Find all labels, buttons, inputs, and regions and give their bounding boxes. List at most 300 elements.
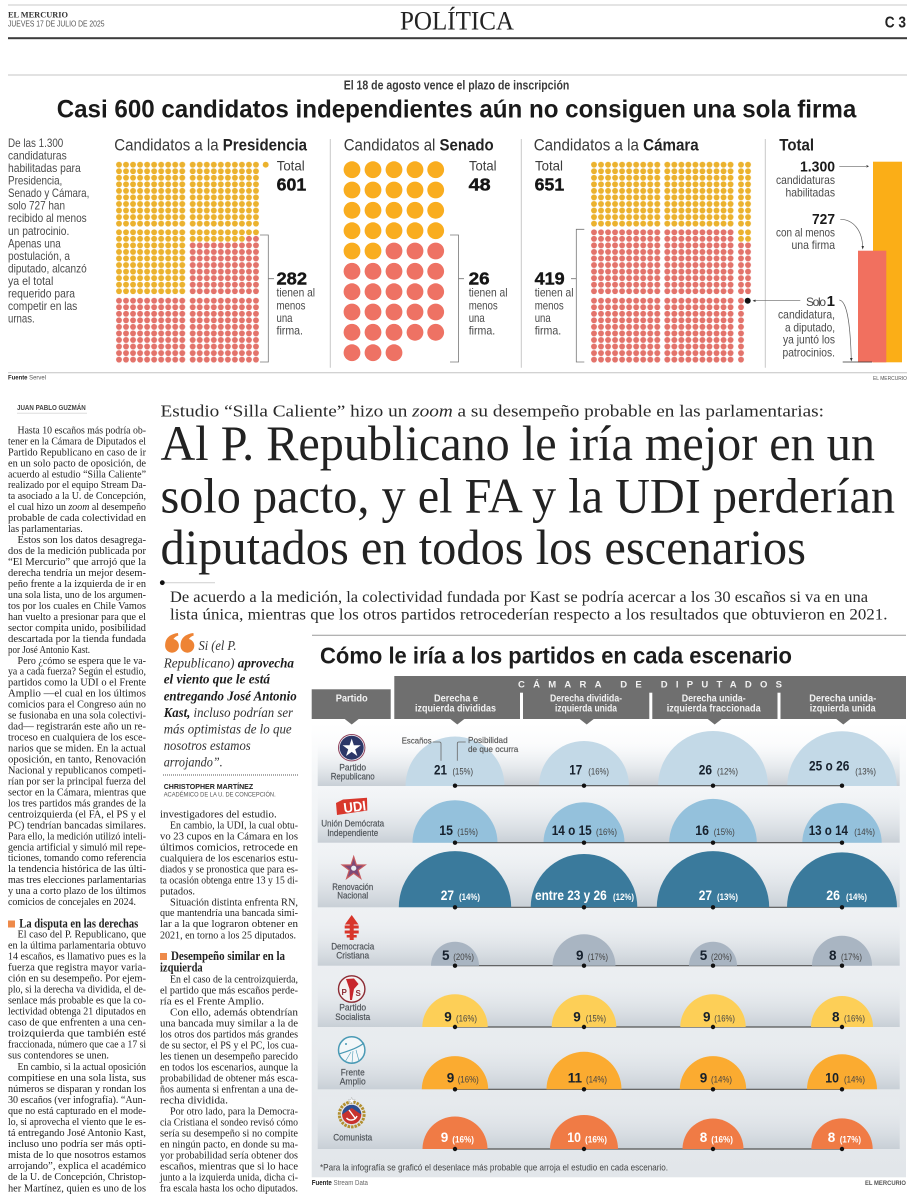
article column 1: 14 escaños, es llamativo pues es la [8, 951, 146, 963]
icon: RN star [342, 857, 365, 878]
row: Partido Socialista: (16%) [456, 1014, 477, 1025]
article column 1: números se disparan y rondan los [8, 1083, 146, 1095]
row: Democracia Cristiana: 5 [442, 948, 450, 963]
table header: izquierda unida [555, 703, 617, 715]
row: Comunista: 9 [441, 1130, 448, 1145]
row: Partido Republicano: 21 [434, 762, 447, 777]
subheading: Desempeño similar en la izquierda: Desempeño similar en la [171, 949, 286, 963]
panel: candidatos a la Presidencia: 601 [277, 175, 306, 195]
row: UDI: (14%) [854, 827, 875, 838]
row: Renovación Nacional: (14%) [846, 892, 867, 903]
article column 1: El caso del P. Republicano, que [18, 929, 146, 941]
source: Stream Data [312, 1180, 906, 1187]
row: UDI: 15 [439, 823, 453, 838]
row: Partido Socialista: (15%) [586, 1014, 606, 1025]
article column 1: troizquierda que también esté [8, 1027, 146, 1039]
article column 1: “El Mercurio” que arrojó que la [8, 556, 146, 568]
panel: candidatos a la Presidencia: menos [276, 298, 306, 312]
intro text block: candidates: Presidencia, [8, 174, 62, 188]
row: Comunista [318, 1095, 900, 1151]
pull quote: entregando José Antonio [164, 689, 297, 704]
article column 1: mas tres elecciones parlamentarias [8, 874, 146, 886]
article column 2: sería su desempeño si no compite [160, 1127, 298, 1139]
pull quote: más optimistas de lo que [164, 723, 292, 738]
article column 2: en ningún pacto, en donde su ma- [160, 1138, 298, 1150]
article column 1: plo, si la derecha va dividida, el de- [8, 984, 146, 996]
article column 2: escaños, mientras que si lo hace [160, 1160, 298, 1172]
article column 1: ción en su desempeño. Por ejem- [8, 973, 146, 985]
headline: Partido Republicano: Al P. Republicano le iría mejor en un [160, 415, 875, 471]
intro text block: candidates: un patrocinio. [8, 224, 69, 238]
article column 1: y una a corto plazo de los últimos [8, 885, 146, 897]
row: Partido Republicano: (12%) [717, 766, 738, 777]
intro text block: candidates: diputado, alcanzó [8, 261, 87, 275]
row: Democracia Cristiana: (20%) [453, 952, 474, 963]
article column 1: sector compita unido, posibilidad [8, 622, 146, 634]
panel: total bars: 727 [812, 211, 835, 228]
article column 1: que no está capturado en el mode- [8, 1105, 146, 1117]
row: Frente Amplio [318, 1035, 900, 1092]
article column 1: ta asociado a la U. de Concepción, [8, 490, 146, 502]
article column 1: las parlamentarias. [8, 523, 83, 535]
article column 2: lar a la que lograron obtener en [160, 918, 299, 930]
article column 2: yor probabilidad sería obtener dos [160, 1149, 298, 1161]
article column 2: putados. [160, 885, 195, 897]
article column 2: Situación distinta enfrenta RN, [170, 896, 298, 908]
legend: escaños and posibilidad: de que ocurra [468, 744, 519, 754]
legend: escaños and posibilidad: Posibilidad [468, 735, 508, 745]
source: Stream Data: EL MERCURIO [865, 1180, 906, 1187]
headline: Partido Republicano: diputados en todos los escenarios [160, 519, 806, 575]
article column 2: vo 23 cupos en la Cámara en los [160, 830, 298, 842]
row: Partido Socialista: Socialista [335, 1012, 370, 1022]
icon: quotation mark [165, 633, 194, 653]
panel: candidatos a la Presidencia: Candidatos a la Presidencia [114, 136, 307, 155]
panel: candidatos al Senado: tienen al [469, 286, 508, 300]
article column 1: lectividad obtenga 21 diputados en [8, 1006, 146, 1018]
article column 1: en la última parlamentaria obtuvo [8, 940, 146, 952]
row: Democracia Cristiana: (17%) [588, 952, 608, 963]
article column 1: oposición, en tanto, Renovación [8, 754, 146, 766]
article column 2: últimos comicios, retrocede en [160, 841, 299, 853]
icon: PS emblem: S [356, 989, 362, 998]
article column 1: caso de que enfrenten a una cen- [8, 1016, 146, 1028]
row: Frente Amplio: 9 [700, 1071, 707, 1086]
article column 2: fra escala hasta los ocho diputados. [160, 1183, 298, 1195]
row: UDI: (15%) [714, 827, 735, 838]
row: Renovación Nacional: (12%) [613, 892, 634, 903]
icon: UDI logo: UDI [343, 797, 367, 816]
pull quote: Republicano) aprovecha [163, 656, 294, 671]
panel: total bars: habilitadas [786, 185, 835, 199]
article column 1: ya a cada fuerza? Según el estudio, [8, 666, 146, 678]
panel: candidatos al Senado: Total [469, 158, 496, 174]
panel: candidatos a la Cámara: Total [535, 158, 563, 174]
panel: candidatos a la Presidencia: Total [277, 158, 305, 174]
legend: escaños and posibilidad [402, 735, 519, 761]
article column 2: el partido que más escaños perde- [160, 984, 298, 996]
article column 2 [159, 809, 299, 1195]
row: Democracia Cristiana: (20%) [711, 952, 732, 963]
row: Comunista: (16%) [452, 1134, 474, 1145]
article column 2: en todos los escenarios, aunque la [160, 1061, 298, 1073]
article column 1: rían por ser la principal fuerza del [8, 775, 146, 787]
article column 2: de su sector, el PS y el PC, los cua- [160, 1039, 298, 1051]
article column 1 [8, 424, 146, 1195]
row: Partido Socialista: Partido [339, 1003, 366, 1013]
icon: PS emblem: P [342, 988, 348, 997]
panel: total bars: 1.300 [800, 158, 835, 175]
article column 1: Amplio —el cual en los últimos [8, 688, 146, 700]
footnote: *Para la infografía se graficó el desenlace más probable que arroja el estudio en cada escenario. [320, 1163, 668, 1174]
headline: Partido Republicano: solo pacto, y el FA y la UDI perderían [160, 468, 895, 524]
article column 1: Estos son los datos desagrega- [18, 534, 146, 546]
panel: total bars: candidatura, [778, 308, 835, 322]
article column 2: les tienen un desempeño parecido [160, 1050, 298, 1062]
article column 1: her Martínez, quien es uno de los [8, 1183, 146, 1195]
article column 2: que mantendría una bancada simi- [160, 907, 298, 919]
panel: total bars: a diputado, [785, 320, 835, 334]
source: Servel: EL MERCURIO [873, 376, 908, 382]
article column 1: PC) tendrían bancadas similares. [8, 819, 146, 831]
row: Frente Amplio: 10 [825, 1071, 839, 1086]
article column 1: partidos como la UDI o el Frente [8, 677, 146, 689]
panel: total bars: Total [779, 136, 814, 155]
legend: escaños and posibilidad: Escaños [402, 735, 432, 745]
icon: FA emblem [338, 1037, 365, 1063]
row: Partido Socialista: 9 [703, 1010, 711, 1025]
article column 1: En cambio, si la actual oposición [18, 1061, 146, 1073]
article column 1: senlace más probable es que la co- [8, 994, 146, 1006]
panel: candidatos al Senado [330, 136, 508, 368]
pull quote [163, 633, 298, 798]
icon: Republicano star [338, 734, 365, 761]
intro text: measurement: De acuerdo a la medición, la colectividad fundada por Kast se podría acercar a los 30 escaños si va en una [170, 589, 868, 606]
panel: candidatos a la Cámara: firma. [535, 323, 561, 337]
article column 2: los otros dos partidos más grandes [160, 1028, 298, 1040]
row: Renovación Nacional [318, 845, 900, 910]
article column 2: ños aumenta si enfrentan a una de- [160, 1083, 298, 1095]
article column 1: dos de la medición publicada por [8, 545, 146, 557]
article column 1: derecha tendría un mejor desem- [8, 567, 146, 579]
article column 1: gencia artificial y simuló mil repe- [8, 841, 146, 853]
intro text block: candidates: Apenas una [8, 236, 61, 250]
panel: candidatos a la Presidencia: 282 [276, 268, 307, 288]
masthead: EL MERCURIO [8, 10, 68, 20]
infographic title: Cómo le iría a los partidos en cada escenario [320, 642, 792, 668]
article column 1: mista de lo que nosotros estamos [8, 1149, 146, 1161]
row: Frente Amplio: (16%) [458, 1075, 479, 1086]
article column 1: dad— registrarán este año un re- [8, 721, 146, 733]
panel: candidatos al Senado: firma. [469, 323, 495, 337]
row: Partido Republicano: 25 o 26 [809, 759, 850, 774]
article column 2: investigadores del estudio. [160, 809, 277, 821]
kicker: candidates story: El 18 de agosto vence el plazo de inscripción [344, 78, 569, 92]
row: Partido Socialista: 9 [573, 1010, 581, 1025]
row: Frente Amplio: (14%) [844, 1075, 865, 1086]
article column 1: por José Antonio Kast. [8, 644, 90, 656]
article column 1: la tendencia histórica de las últi- [8, 863, 146, 875]
article column 2: Con ello, además obtendrían [170, 1006, 299, 1018]
article column 1: peño frente a la izquierda de ir en [8, 578, 146, 590]
pull quote: Si (el P. [198, 639, 236, 654]
article column 1: compitiese en una sola lista, sus [8, 1072, 146, 1084]
intro text block: candidates: postulación, a [8, 249, 70, 263]
row: Partido Republicano: 26 [699, 762, 712, 777]
article column 1: realizado por el equipo Stream Da- [8, 479, 146, 491]
row: UDI: (16%) [596, 827, 617, 838]
article column 1: sector en la Cámara, mientras que [8, 786, 146, 798]
pull quote: arrojando”. [164, 756, 223, 771]
row: Renovación Nacional: Nacional [337, 891, 368, 901]
row: Partido Republicano: Partido [339, 763, 366, 773]
intro text block: candidates: competir en las [8, 299, 77, 313]
article column 1: incluso uno podría ser más opti- [8, 1138, 146, 1150]
bar: 1.300 habilitadas [873, 162, 902, 362]
panel: candidatos a la Presidencia: tienen al [276, 286, 315, 300]
row: Renovación Nacional: 27 [699, 888, 712, 903]
row: Renovación Nacional: (14%) [459, 892, 480, 903]
row: Partido Republicano: (13%) [855, 766, 876, 777]
row: Partido Republicano: (16%) [588, 766, 609, 777]
table header: Derecha unida- [682, 693, 746, 705]
article column 2: En cambio, la UDI, la cual obtu- [170, 819, 298, 831]
subheading: La disputa en las derechas: La disputa en las derechas [19, 916, 138, 930]
article column 1: narios que se miden. En la actual [8, 742, 146, 754]
intro text block: candidates: habilitadas para [8, 161, 81, 175]
row: Partido Socialista: 9 [444, 1010, 452, 1025]
masthead: C 3 [885, 14, 906, 31]
subheading: Desempeño similar en la izquierda [160, 949, 286, 975]
row: Democracia Cristiana: 8 [829, 948, 837, 963]
pull quote: ACADÉMICO DE LA U. DE CONCEPCIÓN. [164, 791, 276, 798]
table header: Partido [336, 693, 368, 705]
panel: candidatos al Senado: 48 [469, 175, 491, 195]
intro text block: candidates [8, 136, 89, 326]
article column 1: de la U. de Concepción, Christop- [8, 1171, 146, 1183]
article column 2: En el caso de la centroizquierda, [170, 973, 298, 985]
table header: izquierda fraccionada [667, 703, 761, 715]
intro text block: candidates: solo 727 han [8, 199, 65, 213]
row: Comunista: (16%) [711, 1134, 733, 1145]
panel: total bars: ya juntó los [783, 333, 835, 347]
row: Partido Republicano: Republicano [331, 771, 375, 781]
row: Renovación Nacional: 27 [441, 888, 454, 903]
row: Renovación Nacional: 26 [826, 888, 840, 903]
pull quote: nosotros estamos [164, 739, 251, 754]
row: Renovación Nacional: Renovación [332, 882, 373, 892]
article column 2: Por otro lado, para la Democra- [170, 1105, 298, 1117]
article column 2: ta ocasión obtenga entre 13 y 15 di- [160, 874, 298, 886]
article column 1: se fusionaba en una sola colectivi- [8, 710, 146, 722]
row: Democracia Cristiana: Democracia [331, 941, 374, 951]
icon: PS emblem [338, 976, 365, 1002]
pull quote: CHRISTOPHER MARTÍNEZ [164, 782, 254, 791]
article column 1: acuerdo al estudio “Silla Caliente” [8, 468, 146, 480]
article column 1: los tres partidos más grandes de la [8, 797, 146, 809]
icon: DC arrow cross [345, 915, 359, 940]
title: candidates story: Casi 600 candidatos independientes aún no consiguen una sola firma [57, 95, 857, 123]
intro text: measurement [170, 589, 888, 623]
panel: scenario infographic [312, 635, 906, 1177]
row: Frente Amplio: (14%) [586, 1075, 607, 1086]
table header: Derecha unida- [809, 693, 877, 705]
article column 1: tener en la Cámara de Diputados el [8, 435, 146, 447]
article column 1: troceso en cualquiera de los esce- [8, 732, 146, 744]
row: Comunista: 8 [700, 1130, 708, 1145]
source: Servel: Fuente Servel [8, 374, 47, 382]
article column 1: una sola lista, uno de los argumen- [8, 589, 146, 601]
headline: Partido Republicano [160, 415, 895, 575]
subheading: Desempeño similar en la izquierda: izquierda [160, 961, 203, 975]
article column 1: probable de cada colectividad en [8, 512, 146, 524]
row: UDI: 14 o 15 [552, 823, 592, 838]
table header: izquierda unida [810, 703, 876, 715]
article column 2: junto a la izquierda unida, dicha ci- [159, 1171, 298, 1183]
row: Democracia Cristiana: (17%) [841, 952, 862, 963]
panel: total bars: patrocinios. [782, 345, 835, 359]
article column 1: lo, si aprovecha el viento que le es- [8, 1116, 146, 1128]
panel: candidatos al Senado: una [469, 311, 485, 325]
arrows: total callouts [752, 165, 872, 362]
row: Comunista: 8 [828, 1130, 836, 1145]
row: Democracia Cristiana: 5 [700, 948, 708, 963]
panel: total bars: con al menos [776, 226, 835, 240]
intro text block: candidates: candidaturas [8, 148, 67, 162]
row: Frente Amplio: 11 [568, 1071, 582, 1086]
intro text: measurement: lista única, mientras que los otros partidos retrocederían respecto a los resultados que obtuvieron en 2021. [170, 606, 888, 623]
row: Democracia Cristiana: Cristiana [336, 951, 369, 961]
article column 1: tá entregando José Antonio Kast, [8, 1127, 146, 1139]
article column 1: en un solo pacto de oposición, de [8, 457, 146, 469]
article column 1: el cual hizo un zoom al desempeño [8, 501, 146, 513]
row: UDI: Independiente [327, 828, 378, 838]
intro text block: candidates: recibido al menos [8, 211, 87, 225]
row: Frente Amplio: 9 [447, 1071, 454, 1086]
panel: candidatos a la Cámara: tienen al [535, 286, 574, 300]
dot grid: Presidencia [116, 161, 269, 363]
row: Partido Socialista [318, 975, 900, 1029]
table header: CÁMARA DE DIPUTADOS [518, 679, 782, 690]
row: Comunista: Comunista [333, 1133, 372, 1143]
row: Partido Republicano [318, 731, 900, 788]
table header: Derecha dividida- [550, 693, 622, 705]
row: Comunista: (16%) [585, 1134, 607, 1145]
row: Partido Socialista: (16%) [714, 1014, 735, 1025]
dot grid: Senado [344, 161, 444, 361]
panel: candidatos a la Cámara: Candidatos a la Cámara [534, 136, 699, 155]
panel: candidatos a la Presidencia [114, 136, 315, 363]
panel: candidatos a la Cámara: menos [535, 298, 564, 312]
row: UDI [318, 788, 900, 845]
intro text block: candidates: Senado y Cámara, [8, 186, 89, 200]
article column 1: tos por los cuales en Chile Vamos [8, 600, 146, 612]
panel: total bars: una firma [792, 238, 835, 252]
table header: Derecha e [434, 693, 478, 705]
panel: candidatos al Senado: menos [469, 298, 498, 312]
deck: study: Estudio “Silla Caliente” hizo un zoom a su desempeño probable en las parlamentarias: [160, 402, 824, 421]
row: UDI: 13 o 14 [809, 823, 848, 838]
panel: candidatos a la Cámara: 419 [535, 268, 565, 288]
pull quote: Kast, incluso podrían ser [163, 706, 294, 721]
panel: candidatos a la Cámara: 651 [535, 175, 564, 195]
panel: total bars: candidaturas [776, 173, 835, 187]
article column 2: cualquiera de los escenarios estu- [160, 852, 298, 864]
article column 2: diados y se pronostica que para es- [160, 863, 298, 875]
row: Partido Republicano: (15%) [452, 766, 473, 777]
row: Partido Socialista: 8 [832, 1010, 840, 1025]
article column 1: fraccionada, número que cae a 17 si [8, 1038, 146, 1050]
article column 1: ticiones, tomando como referencia [8, 852, 146, 864]
icon: PC emblem [339, 1097, 364, 1127]
masthead: POLÍTICA [400, 6, 514, 35]
article column 1: han vuelto a presionar para que el [8, 611, 146, 623]
row: Frente Amplio: (14%) [711, 1075, 732, 1086]
row: Comunista: 10 [567, 1130, 581, 1145]
intro text block: candidates: De las 1.300 [8, 136, 64, 150]
article column 2: ría es el Frente Amplio. [160, 995, 264, 1007]
article column 1: comicios para el Congreso aún no [8, 699, 146, 711]
row: UDI: (15%) [457, 827, 478, 838]
table header [312, 676, 906, 724]
row: UDI: Unión Demócrata [321, 819, 384, 829]
row: Democracia Cristiana [318, 914, 900, 968]
row: Partido Socialista: (16%) [844, 1014, 865, 1025]
intro text block: candidates: urnas. [8, 312, 35, 326]
article column 1: sus contendores se unen. [8, 1049, 109, 1061]
row: Partido Republicano: 17 [569, 762, 582, 777]
panel: candidatos a la Presidencia: firma. [276, 323, 303, 337]
panel: candidatos a la Cámara [521, 136, 752, 368]
article column 1: fuerza que registra mayor varia- [8, 962, 146, 974]
article column 1: comicios de concejales en 2024. [8, 896, 136, 908]
article column 1: centroizquierda (el FA, el PS y el [8, 808, 146, 820]
row: Democracia Cristiana: 9 [576, 948, 584, 963]
article column 1: Hasta 10 escaños más podría ob- [18, 424, 146, 436]
article column 1: Pero ¿cómo se espera que le va- [18, 655, 146, 667]
source: Stream Data: Fuente Stream Data [312, 1180, 368, 1187]
panel: candidatos al Senado: Candidatos al Senado [344, 136, 494, 155]
source: Servel [8, 373, 908, 382]
intro text block: candidates: ya el total [8, 274, 53, 288]
article column 2: 2021, en torno a los 25 diputados. [160, 929, 296, 941]
table header: izquierda divididas [415, 703, 496, 715]
row: Renovación Nacional: (13%) [717, 892, 738, 903]
row: Frente Amplio: Amplio [340, 1077, 366, 1087]
masthead [8, 5, 907, 75]
dot grid: Cámara [590, 161, 752, 363]
panel: total bars [752, 136, 902, 368]
article column 1: Nacional y republicanos competi- [8, 764, 146, 776]
panel: total bars: Solo 1 [806, 293, 835, 310]
row: Renovación Nacional: entre 23 y 26 [535, 888, 607, 903]
pull quote: el viento que le está [164, 673, 271, 688]
article column 2: recha dividida. [160, 1094, 228, 1106]
masthead: JUEVES 17 DE JULIO DE 2025 [8, 20, 105, 29]
row: Comunista: (17%) [840, 1134, 861, 1145]
intro text block: candidates: requerido para [8, 286, 75, 300]
row: Frente Amplio: Frente [341, 1068, 365, 1078]
panel: candidatos al Senado: 26 [469, 268, 490, 288]
article column 2: una bancada muy similar a la de [160, 1017, 298, 1029]
article column 1: arrojando”, explica el académico [8, 1160, 146, 1172]
byline: JUAN PABLO GUZMÁN [17, 403, 86, 412]
panel: candidatos a la Presidencia: una [276, 311, 293, 325]
row: UDI: 16 [695, 823, 709, 838]
bar: 727 con firma [858, 251, 886, 362]
article column 1: descartada por la tienda fundada [8, 633, 146, 645]
article column 2: probabilidad de obtener más esca- [160, 1072, 298, 1084]
